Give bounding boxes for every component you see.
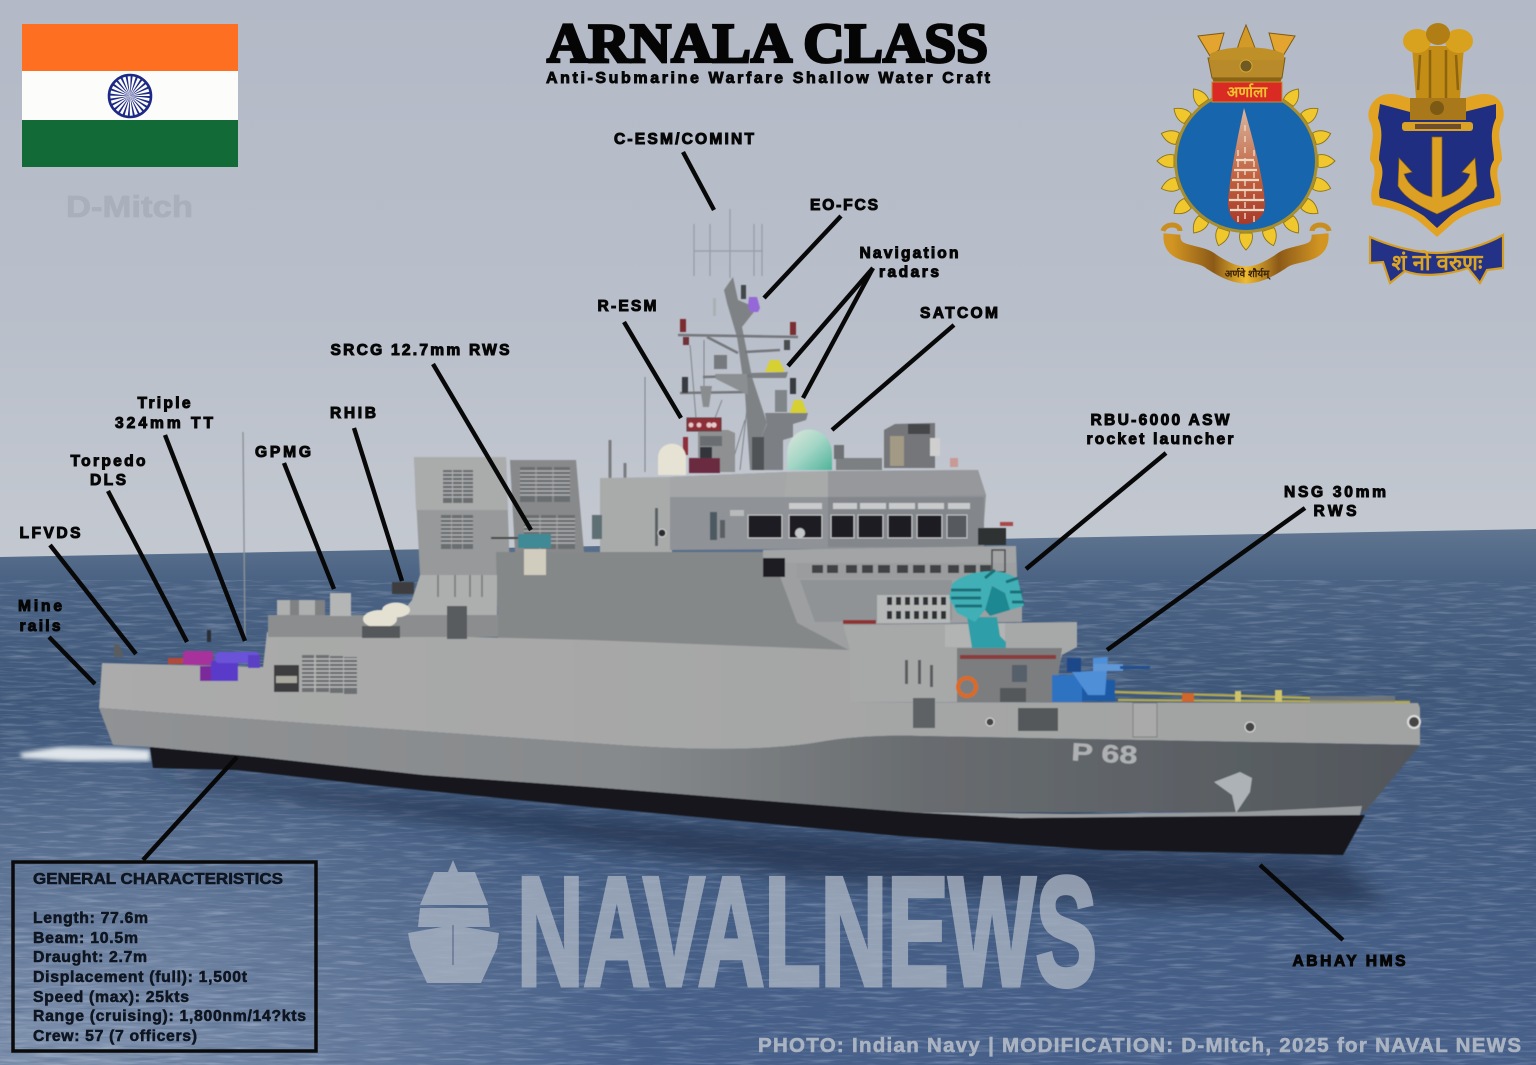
badge: motto ribbon: शं नो वरुणः bbox=[1392, 249, 1484, 275]
bow emblem bbox=[1214, 772, 1252, 813]
logo: NAVALNEWS wordmark: NAVALNEWS bbox=[517, 845, 1097, 1018]
subtitle: Anti-Submarine Warfare Shallow Water Craft bbox=[546, 70, 991, 87]
main hull, light upper band bbox=[99, 632, 1420, 749]
lower hull, dark band bbox=[99, 708, 1420, 812]
icon: EO fire control, purple bbox=[748, 297, 760, 312]
callout: NSG 30mm RWS: RWS bbox=[1314, 503, 1356, 520]
callout: Navigation radars: Navigation bbox=[860, 245, 958, 262]
LFVDS launcher bbox=[114, 644, 124, 657]
callout: RBU-6000 ASW rocket launcher bbox=[1026, 412, 1234, 569]
callout: Torpedo DLS bbox=[70, 453, 187, 642]
mast: lights bbox=[680, 285, 796, 394]
spec list: Length: 77.6m bbox=[33, 910, 148, 927]
ship: Arnala class corvette P68 bbox=[99, 209, 1420, 855]
panel: general characteristics bbox=[13, 862, 316, 1051]
badge: motto ribbon bbox=[1370, 235, 1503, 283]
watermark: D-Mitch: D-Mitch bbox=[66, 189, 193, 224]
ship shadow on water bbox=[150, 770, 1390, 905]
whip antenna, aft bbox=[243, 432, 245, 642]
mast: antennas bbox=[694, 209, 763, 278]
mast: rigging bbox=[645, 340, 748, 472]
RHIB boats bbox=[362, 602, 410, 638]
flag of India bbox=[22, 24, 238, 167]
badge: anchor bbox=[1398, 137, 1477, 214]
icon: Ashoka chakra bbox=[109, 75, 151, 117]
crest: Indian Navy badge bbox=[1368, 23, 1504, 283]
white dome bbox=[658, 444, 686, 475]
crest: name band: अर्णाला bbox=[1227, 83, 1268, 101]
SATCOM dome, green bbox=[787, 430, 832, 470]
watermark: Naval News logo bbox=[408, 845, 1097, 1018]
spec list: Speed (max): 25kts bbox=[33, 989, 189, 1006]
badge: Ashoka lion capital bbox=[1402, 23, 1473, 131]
callout: Mine rails: Mine bbox=[18, 598, 62, 615]
callout: C-ESM/COMINT bbox=[614, 131, 754, 210]
callout: ABHAY HMS: ABHAY HMS bbox=[1292, 953, 1406, 970]
hatch bbox=[763, 558, 785, 577]
callout: GPMG bbox=[255, 444, 334, 589]
callout: LFVDS bbox=[20, 525, 136, 654]
callout: RBU-6000 ASW rocket launcher: RBU-6000 ASW bbox=[1090, 412, 1230, 429]
leader line to characteristics box bbox=[143, 757, 237, 860]
R-ESM housing bbox=[683, 418, 735, 473]
torpedo tubes and DLS, purple bbox=[168, 630, 260, 681]
SRCG 12.7mm RWS gun bbox=[491, 534, 551, 575]
bow railing and deck fittings bbox=[1115, 690, 1410, 702]
spec list: Beam: 10.5m bbox=[33, 930, 138, 947]
panel heading: GENERAL CHARACTERISTICS bbox=[33, 871, 283, 888]
light strip at bow bbox=[906, 806, 1362, 818]
callout: GPMG: GPMG bbox=[255, 444, 311, 461]
title: ARNALA CLASS bbox=[547, 13, 988, 75]
mast: yards bbox=[678, 335, 798, 393]
crest: blue disc bbox=[1177, 92, 1315, 230]
callout: Navigation radars: radars bbox=[879, 264, 939, 281]
after deckhouse bbox=[600, 477, 672, 552]
callout: Mine rails bbox=[18, 598, 95, 684]
callout: Torpedo DLS: Torpedo bbox=[70, 453, 146, 470]
callout: SRCG 12.7mm RWS bbox=[330, 342, 531, 530]
spec list: Draught: 2.7m bbox=[33, 949, 147, 966]
RBU-6000 rocket launcher, teal bbox=[949, 570, 1024, 648]
crest: name band bbox=[1212, 82, 1282, 102]
forecastle deckhouse bbox=[843, 622, 1420, 737]
callout: R-ESM: R-ESM bbox=[598, 298, 656, 315]
superstructure: gallery under bridge bbox=[763, 546, 1022, 652]
stern deck layer bbox=[268, 575, 498, 639]
funnel stacks bbox=[414, 457, 584, 575]
callout: SATCOM: SATCOM bbox=[920, 305, 998, 322]
callout: Triple 324mm TT: Triple bbox=[138, 395, 191, 412]
callout: SATCOM bbox=[832, 305, 998, 430]
callout: Torpedo DLS: DLS bbox=[90, 472, 126, 489]
callout: NSG 30mm RWS: NSG 30mm bbox=[1284, 484, 1386, 501]
spec list: Range (cruising): 1,800nm/14?kts bbox=[33, 1008, 306, 1025]
ship wake bbox=[20, 747, 150, 761]
mast bbox=[645, 209, 808, 472]
spec list bbox=[33, 910, 306, 1045]
pennant number P68: P 68 bbox=[1071, 738, 1138, 770]
spec list: Crew: 57 (7 officers) bbox=[33, 1028, 197, 1045]
callout: Navigation radars bbox=[788, 245, 958, 398]
callout: RHIB: RHIB bbox=[330, 405, 376, 422]
badge: blue field bbox=[1378, 104, 1496, 228]
photo credit: PHOTO: Indian Navy | MODIFICATION: D-MItch, 2025 for NAVAL NEWS bbox=[758, 1034, 1521, 1057]
mast: tower bbox=[724, 277, 767, 470]
crest: naval crown bbox=[1198, 25, 1295, 83]
callout: EO-FCS: EO-FCS bbox=[810, 197, 878, 214]
callout: R-ESM bbox=[598, 298, 681, 418]
mast: radar platforms bbox=[750, 372, 808, 470]
NSG 30mm RWS gun, blue bbox=[1052, 657, 1150, 702]
roof equipment bbox=[610, 423, 958, 478]
callout: Triple 324mm TT bbox=[115, 395, 245, 641]
callout: LFVDS: LFVDS bbox=[20, 525, 80, 542]
logo: ship icon bbox=[408, 860, 499, 983]
crest: sun rays bbox=[1157, 72, 1335, 250]
badge: shield bbox=[1368, 94, 1504, 237]
crest: motto ribbon: अर्णवे शौर्यम् bbox=[1225, 267, 1271, 280]
stern openings and vents bbox=[274, 655, 357, 694]
boot topping, black bbox=[150, 747, 1365, 855]
navigation radars, yellow bbox=[765, 360, 807, 413]
bridge block bbox=[592, 470, 1013, 550]
callout: RBU-6000 ASW rocket launcher: rocket launcher bbox=[1086, 431, 1234, 448]
callout: NSG 30mm RWS bbox=[1107, 484, 1386, 650]
callout: Triple 324mm TT: 324mm TT bbox=[115, 415, 213, 432]
callout: Mine rails: rails bbox=[20, 618, 61, 635]
callouts: equipment labels with leader lines bbox=[18, 131, 1406, 970]
crest: shell bbox=[1228, 108, 1265, 224]
spec list: Displacement (full): 1,500t bbox=[33, 969, 248, 986]
callout: RHIB bbox=[330, 405, 402, 581]
callout: ABHAY HMS bbox=[1260, 865, 1406, 970]
mid superstructure, stern side bbox=[496, 552, 852, 652]
crest: motto ribbon bbox=[1163, 225, 1329, 280]
callout: EO-FCS bbox=[764, 197, 878, 298]
crest: INS Arnala bbox=[1157, 25, 1335, 280]
background: sea bbox=[0, 529, 1536, 1065]
callout: SRCG 12.7mm RWS: SRCG 12.7mm RWS bbox=[330, 342, 510, 359]
callout: C-ESM/COMINT: C-ESM/COMINT bbox=[614, 131, 754, 148]
background: sky bbox=[0, 0, 1536, 570]
